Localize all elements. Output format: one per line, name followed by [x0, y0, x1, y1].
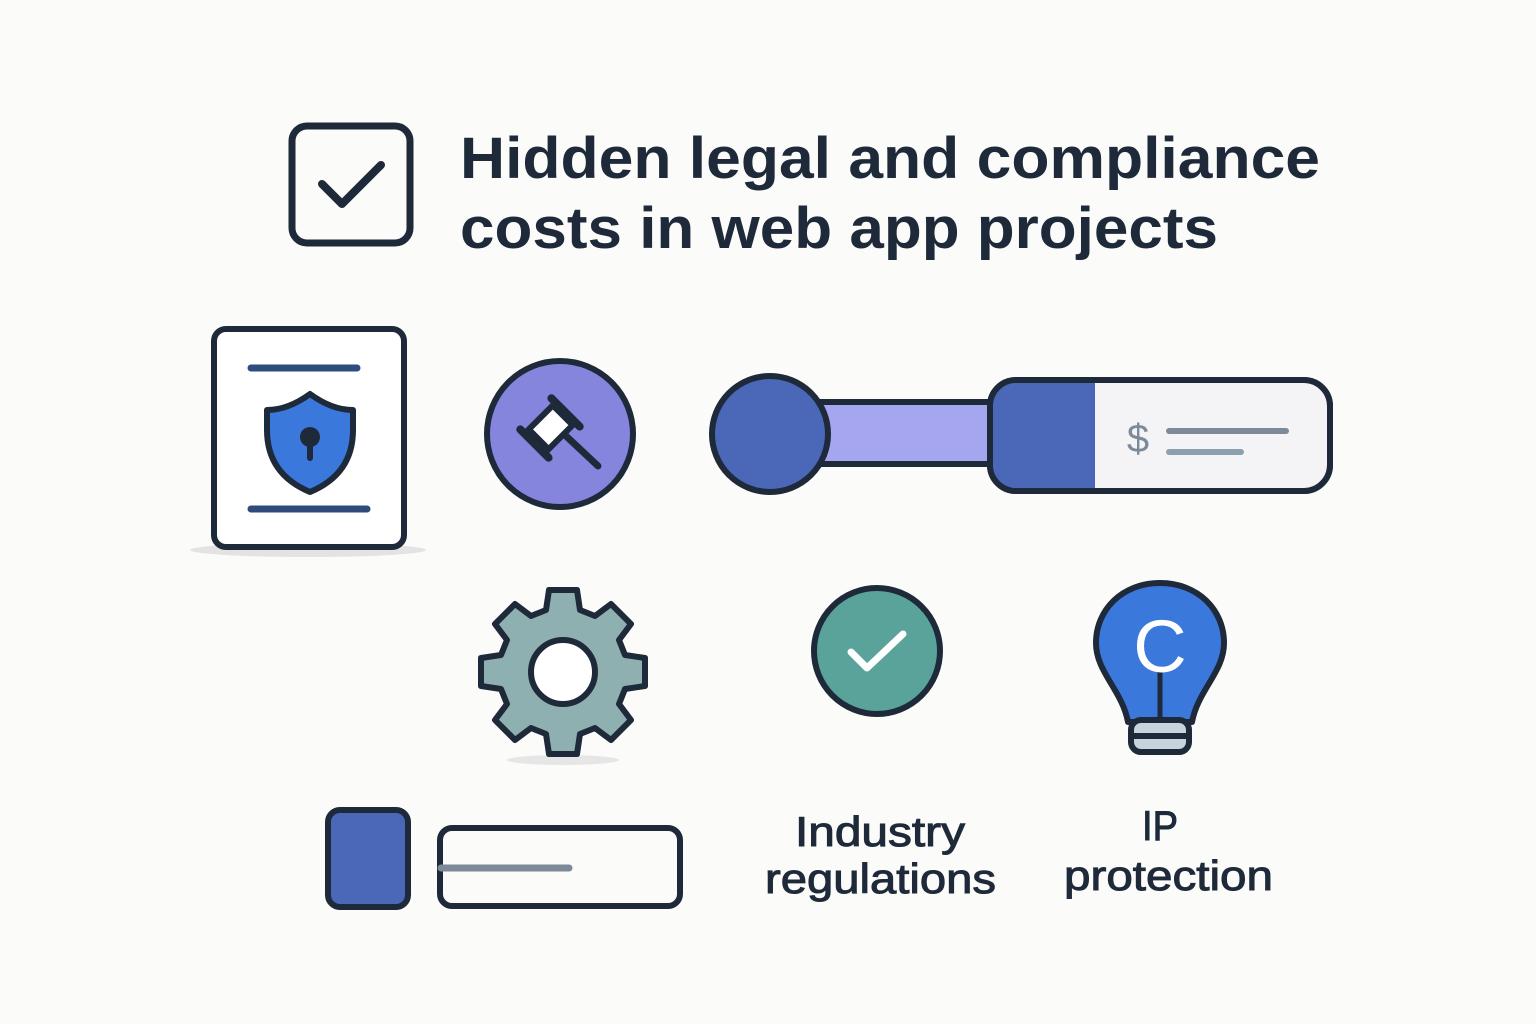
label: industry regulations: Industry: [795, 808, 965, 855]
icon: lightbulb copyright: [1096, 583, 1224, 752]
icon: title checkbox: [292, 126, 410, 243]
icon: lightbulb copyright: C: [1133, 605, 1187, 688]
label: IP protection: protection: [1064, 852, 1273, 899]
icon: cost slider bar: $: [1127, 417, 1149, 461]
title: [460, 126, 1320, 261]
icon: check circle: [814, 588, 940, 714]
label: industry regulations: [765, 808, 996, 902]
icon: blue square with bar: [328, 810, 680, 907]
icon: gear: [481, 590, 645, 765]
icon: document with shield: [190, 329, 426, 557]
label: IP protection: IP: [1142, 802, 1178, 849]
label: industry regulations: regulations: [765, 855, 996, 902]
title: Hidden legal and compliance: [460, 126, 1320, 191]
title: costs in web app projects: [460, 196, 1218, 261]
label: IP protection: [1064, 802, 1273, 899]
icon: gavel circle: [487, 361, 633, 507]
icon: cost slider bar: [712, 376, 1330, 492]
